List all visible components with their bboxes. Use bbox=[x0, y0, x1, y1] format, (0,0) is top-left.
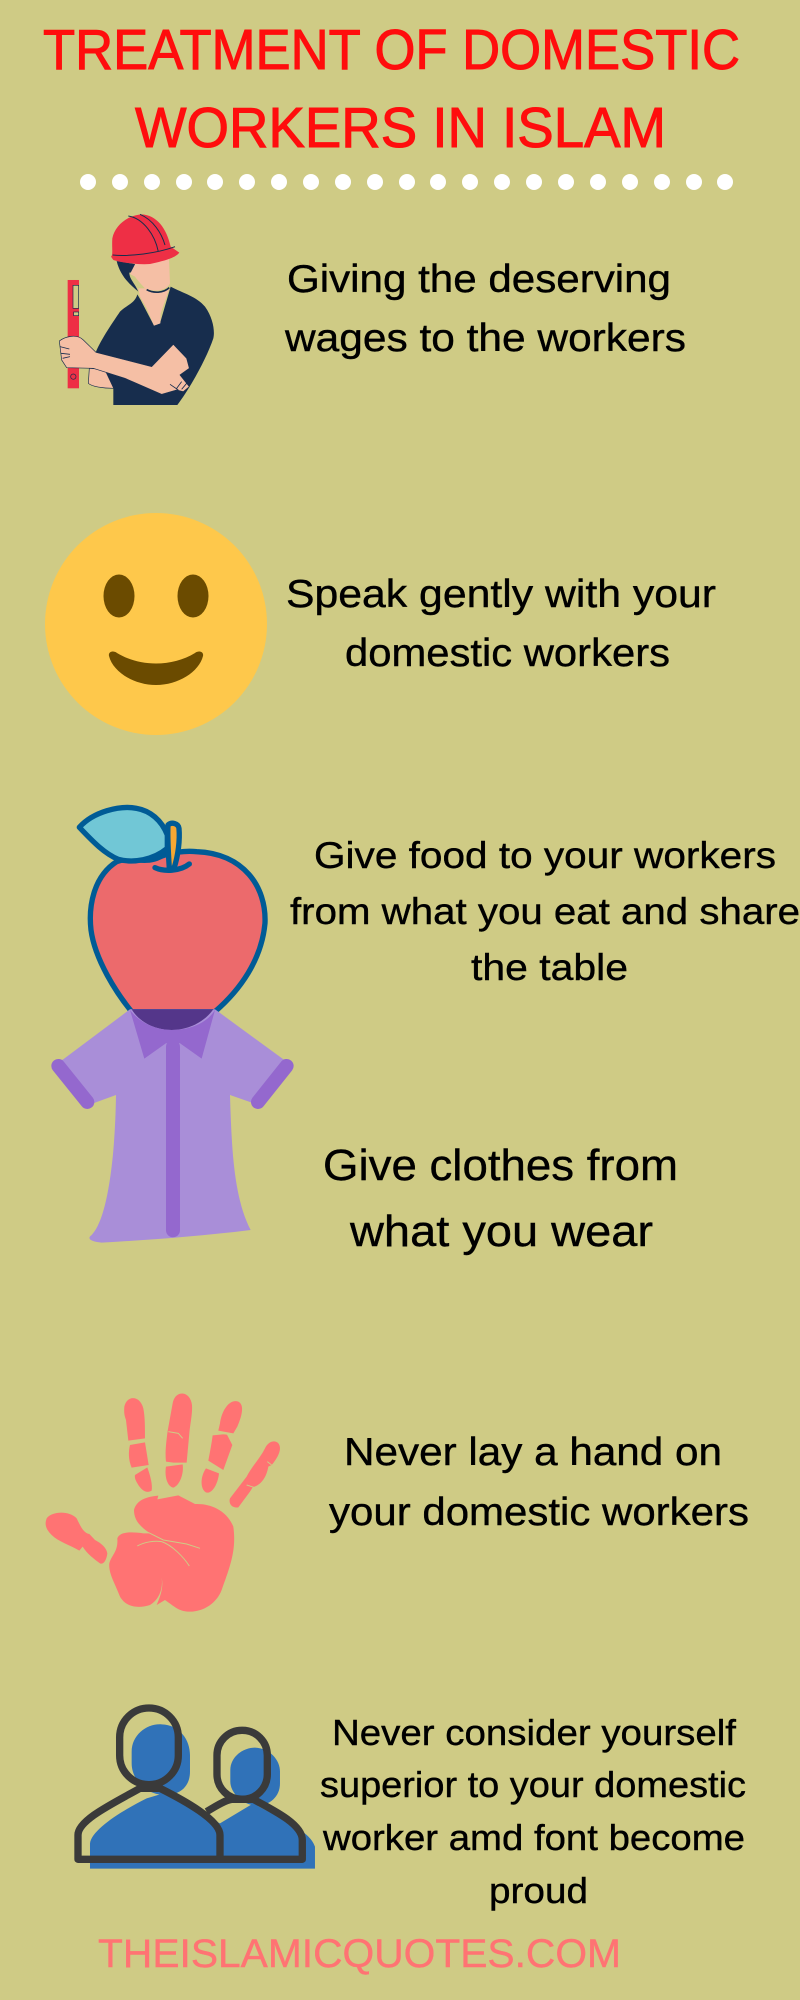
icon: two people bbox=[78, 1708, 315, 1869]
title: WORKERS IN ISLAM bbox=[135, 96, 666, 160]
title bbox=[43, 18, 740, 160]
dotted separator bbox=[80, 174, 733, 190]
icon: construction worker bbox=[59, 214, 214, 405]
icon: shirt bbox=[53, 1009, 293, 1243]
text: wages bbox=[284, 258, 686, 360]
text: clothes: Give clothes from bbox=[323, 1141, 678, 1190]
text: hand: your domestic workers bbox=[329, 1491, 749, 1534]
text: speak gently: domestic workers bbox=[345, 632, 670, 675]
icon: hand print bbox=[46, 1394, 280, 1612]
text: food bbox=[290, 835, 800, 988]
text: superiority: Never consider yourself bbox=[332, 1712, 737, 1753]
icon: apple bbox=[79, 807, 265, 1012]
text: clothes: what you wear bbox=[349, 1207, 653, 1256]
text: food: from what you eat and share bbox=[290, 891, 800, 932]
text: food: the table bbox=[471, 947, 628, 988]
text: wages: Giving the deserving bbox=[287, 258, 671, 301]
text: superiority: proud bbox=[489, 1870, 588, 1911]
text: superiority bbox=[320, 1712, 746, 1911]
text: superiority: worker amd font become bbox=[322, 1817, 745, 1858]
icon: smiley face bbox=[45, 513, 267, 735]
text: hand: Never lay a hand on bbox=[344, 1431, 722, 1474]
text: wages: wages to the workers bbox=[284, 317, 686, 360]
text: speak gently bbox=[286, 573, 716, 675]
text: speak gently: Speak gently with your bbox=[286, 573, 716, 616]
text: hand bbox=[329, 1431, 749, 1534]
text: food: Give food to your workers bbox=[314, 835, 776, 876]
footer website: THEISLAMICQUOTES.COM bbox=[98, 1932, 621, 1976]
text: clothes bbox=[323, 1141, 678, 1256]
text: superiority: superior to your domestic bbox=[320, 1764, 746, 1805]
title: TREATMENT OF DOMESTIC bbox=[43, 18, 740, 82]
